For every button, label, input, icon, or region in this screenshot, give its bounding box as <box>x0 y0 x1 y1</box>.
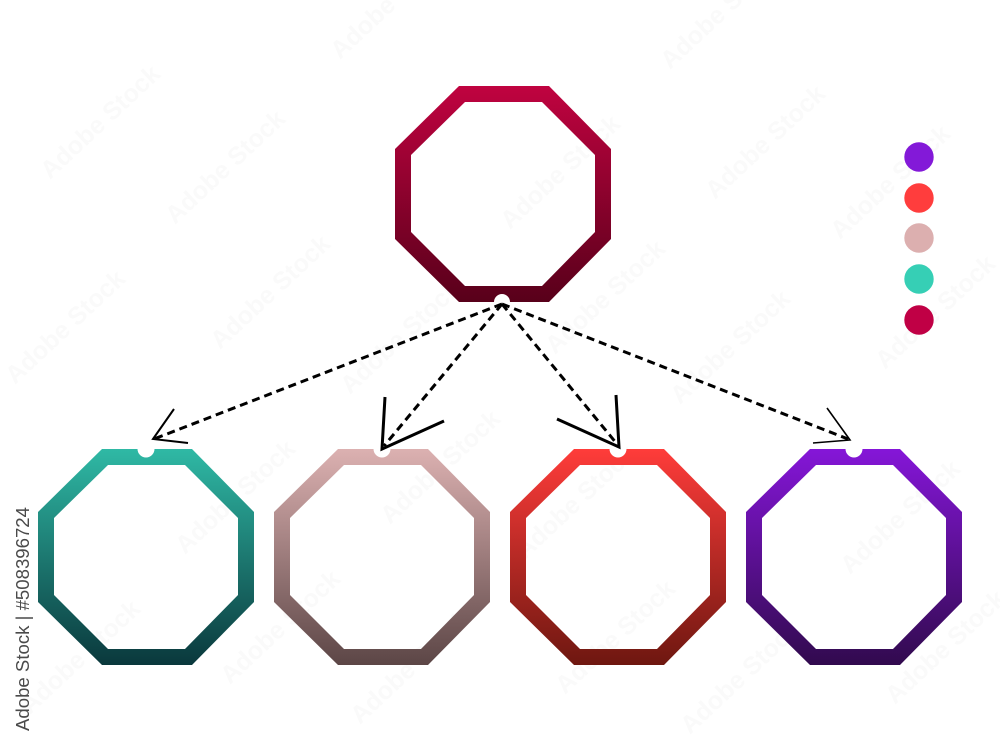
octagon: teal <box>38 440 254 665</box>
legend dots <box>904 142 934 335</box>
watermark pattern: Adobe Stock <box>870 250 1000 374</box>
watermark pattern: Adobe Stock <box>675 615 806 739</box>
watermark pattern: Adobe Stock <box>835 455 966 579</box>
watermark pattern: Adobe Stock <box>35 60 166 184</box>
watermark pattern: Adobe Stock <box>335 275 466 399</box>
top octagon: crimson <box>395 86 611 310</box>
octagon: purple <box>746 440 962 665</box>
watermark pattern: Adobe Stock <box>215 565 346 689</box>
watermark pattern: Adobe Stock <box>0 265 131 389</box>
watermark pattern: Adobe Stock <box>665 285 796 409</box>
watermark pattern: Adobe Stock <box>700 80 831 204</box>
watermark pattern: Adobe Stock <box>345 605 476 729</box>
watermark pattern: Adobe Stock <box>495 110 626 234</box>
watermark pattern: Adobe Stock <box>170 435 301 559</box>
arrow: to teal octagon <box>153 304 502 443</box>
arrow: to red octagon <box>502 304 619 447</box>
watermark pattern: Adobe Stock <box>825 120 956 244</box>
watermark pattern: Adobe Stock <box>510 440 641 564</box>
watermark pattern: Adobe Stock <box>550 575 681 699</box>
octagon: red <box>510 440 726 665</box>
watermark pattern: Adobe Stock <box>205 230 336 354</box>
arrow: to rose octagon <box>382 304 502 449</box>
arrow: to purple octagon <box>502 304 850 443</box>
watermark pattern: Adobe Stock <box>160 105 291 229</box>
watermark pattern: Adobe Stock <box>15 595 146 719</box>
stock credit text: Adobe Stock | #508396724 <box>13 507 33 731</box>
octagon: dusty rose <box>274 440 490 665</box>
watermark pattern: Adobe Stock <box>375 405 506 529</box>
watermark pattern: Adobe Stock <box>540 235 671 359</box>
